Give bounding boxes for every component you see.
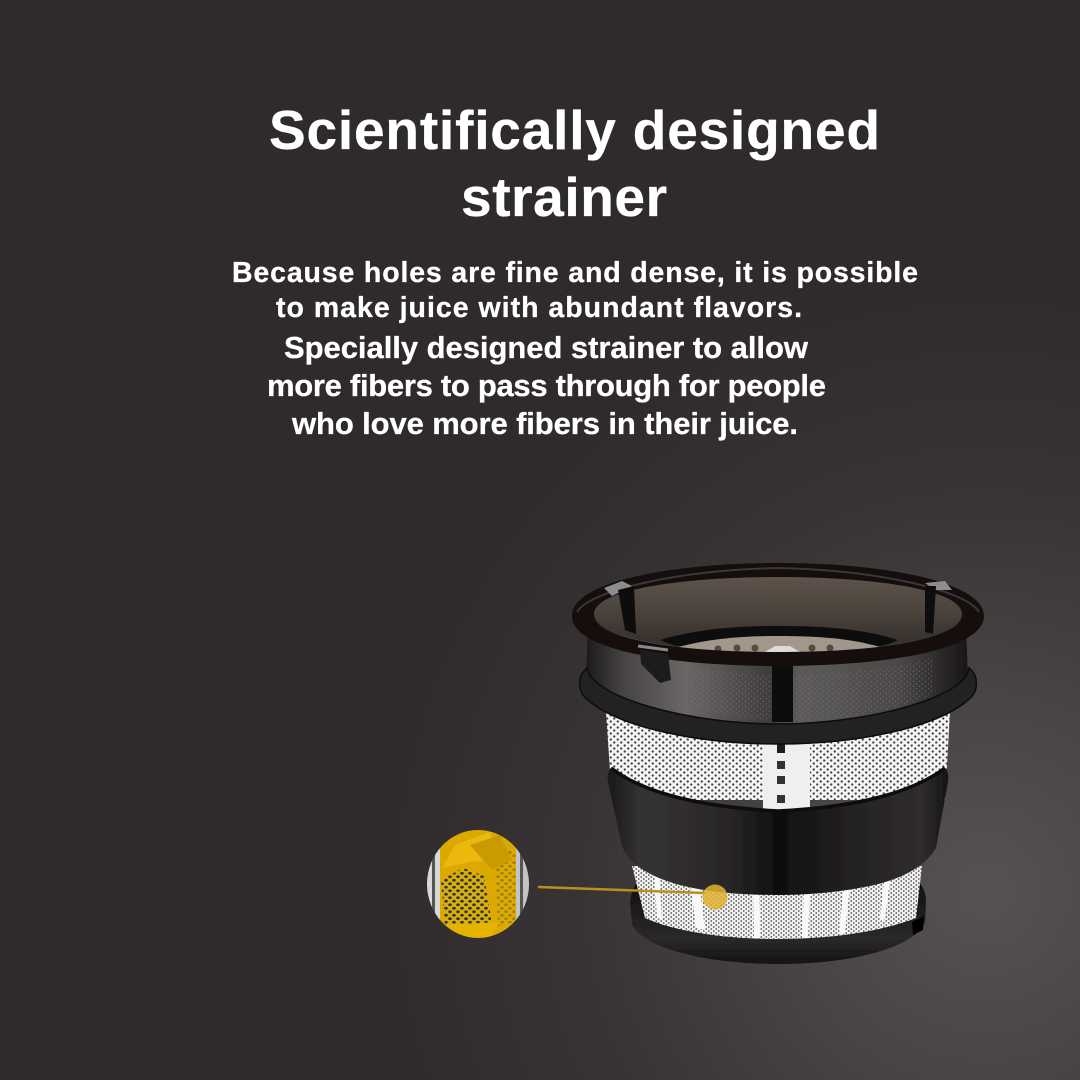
leader line (538, 887, 705, 893)
title (269, 99, 880, 228)
rim highlight (577, 568, 979, 612)
centre rib (772, 660, 793, 722)
text block: bold description: to make juice with abundant flavors. (276, 292, 802, 324)
lower mesh (632, 866, 922, 939)
text block: strainer description: who love more fibers in their juice. (291, 406, 798, 441)
text block: bold description (232, 257, 918, 324)
text block: strainer description (267, 330, 826, 441)
black band (608, 768, 948, 895)
marker dot (702, 884, 728, 910)
magnified lens (427, 830, 529, 938)
band top edge (611, 768, 945, 811)
title: strainer (461, 166, 667, 228)
top rim (572, 563, 984, 666)
spout (640, 650, 671, 683)
strainer product illustration (572, 563, 984, 964)
upper mesh (606, 712, 950, 818)
rim tabs (604, 581, 952, 596)
title: Scientifically designed (269, 99, 880, 161)
text block: strainer description: more fibers to pass through for people (267, 368, 826, 403)
text block: bold description: Because holes are fine and dense, it is possible (232, 257, 918, 289)
inner bowl (590, 573, 966, 653)
upper collar (586, 625, 968, 728)
base ring (630, 880, 926, 964)
callout: zoomed mesh detail (427, 830, 728, 938)
perforated seat inside the bowl (660, 626, 898, 655)
collar ring (580, 668, 976, 744)
text block: strainer description: Specially designed strainer to allow (284, 330, 809, 365)
